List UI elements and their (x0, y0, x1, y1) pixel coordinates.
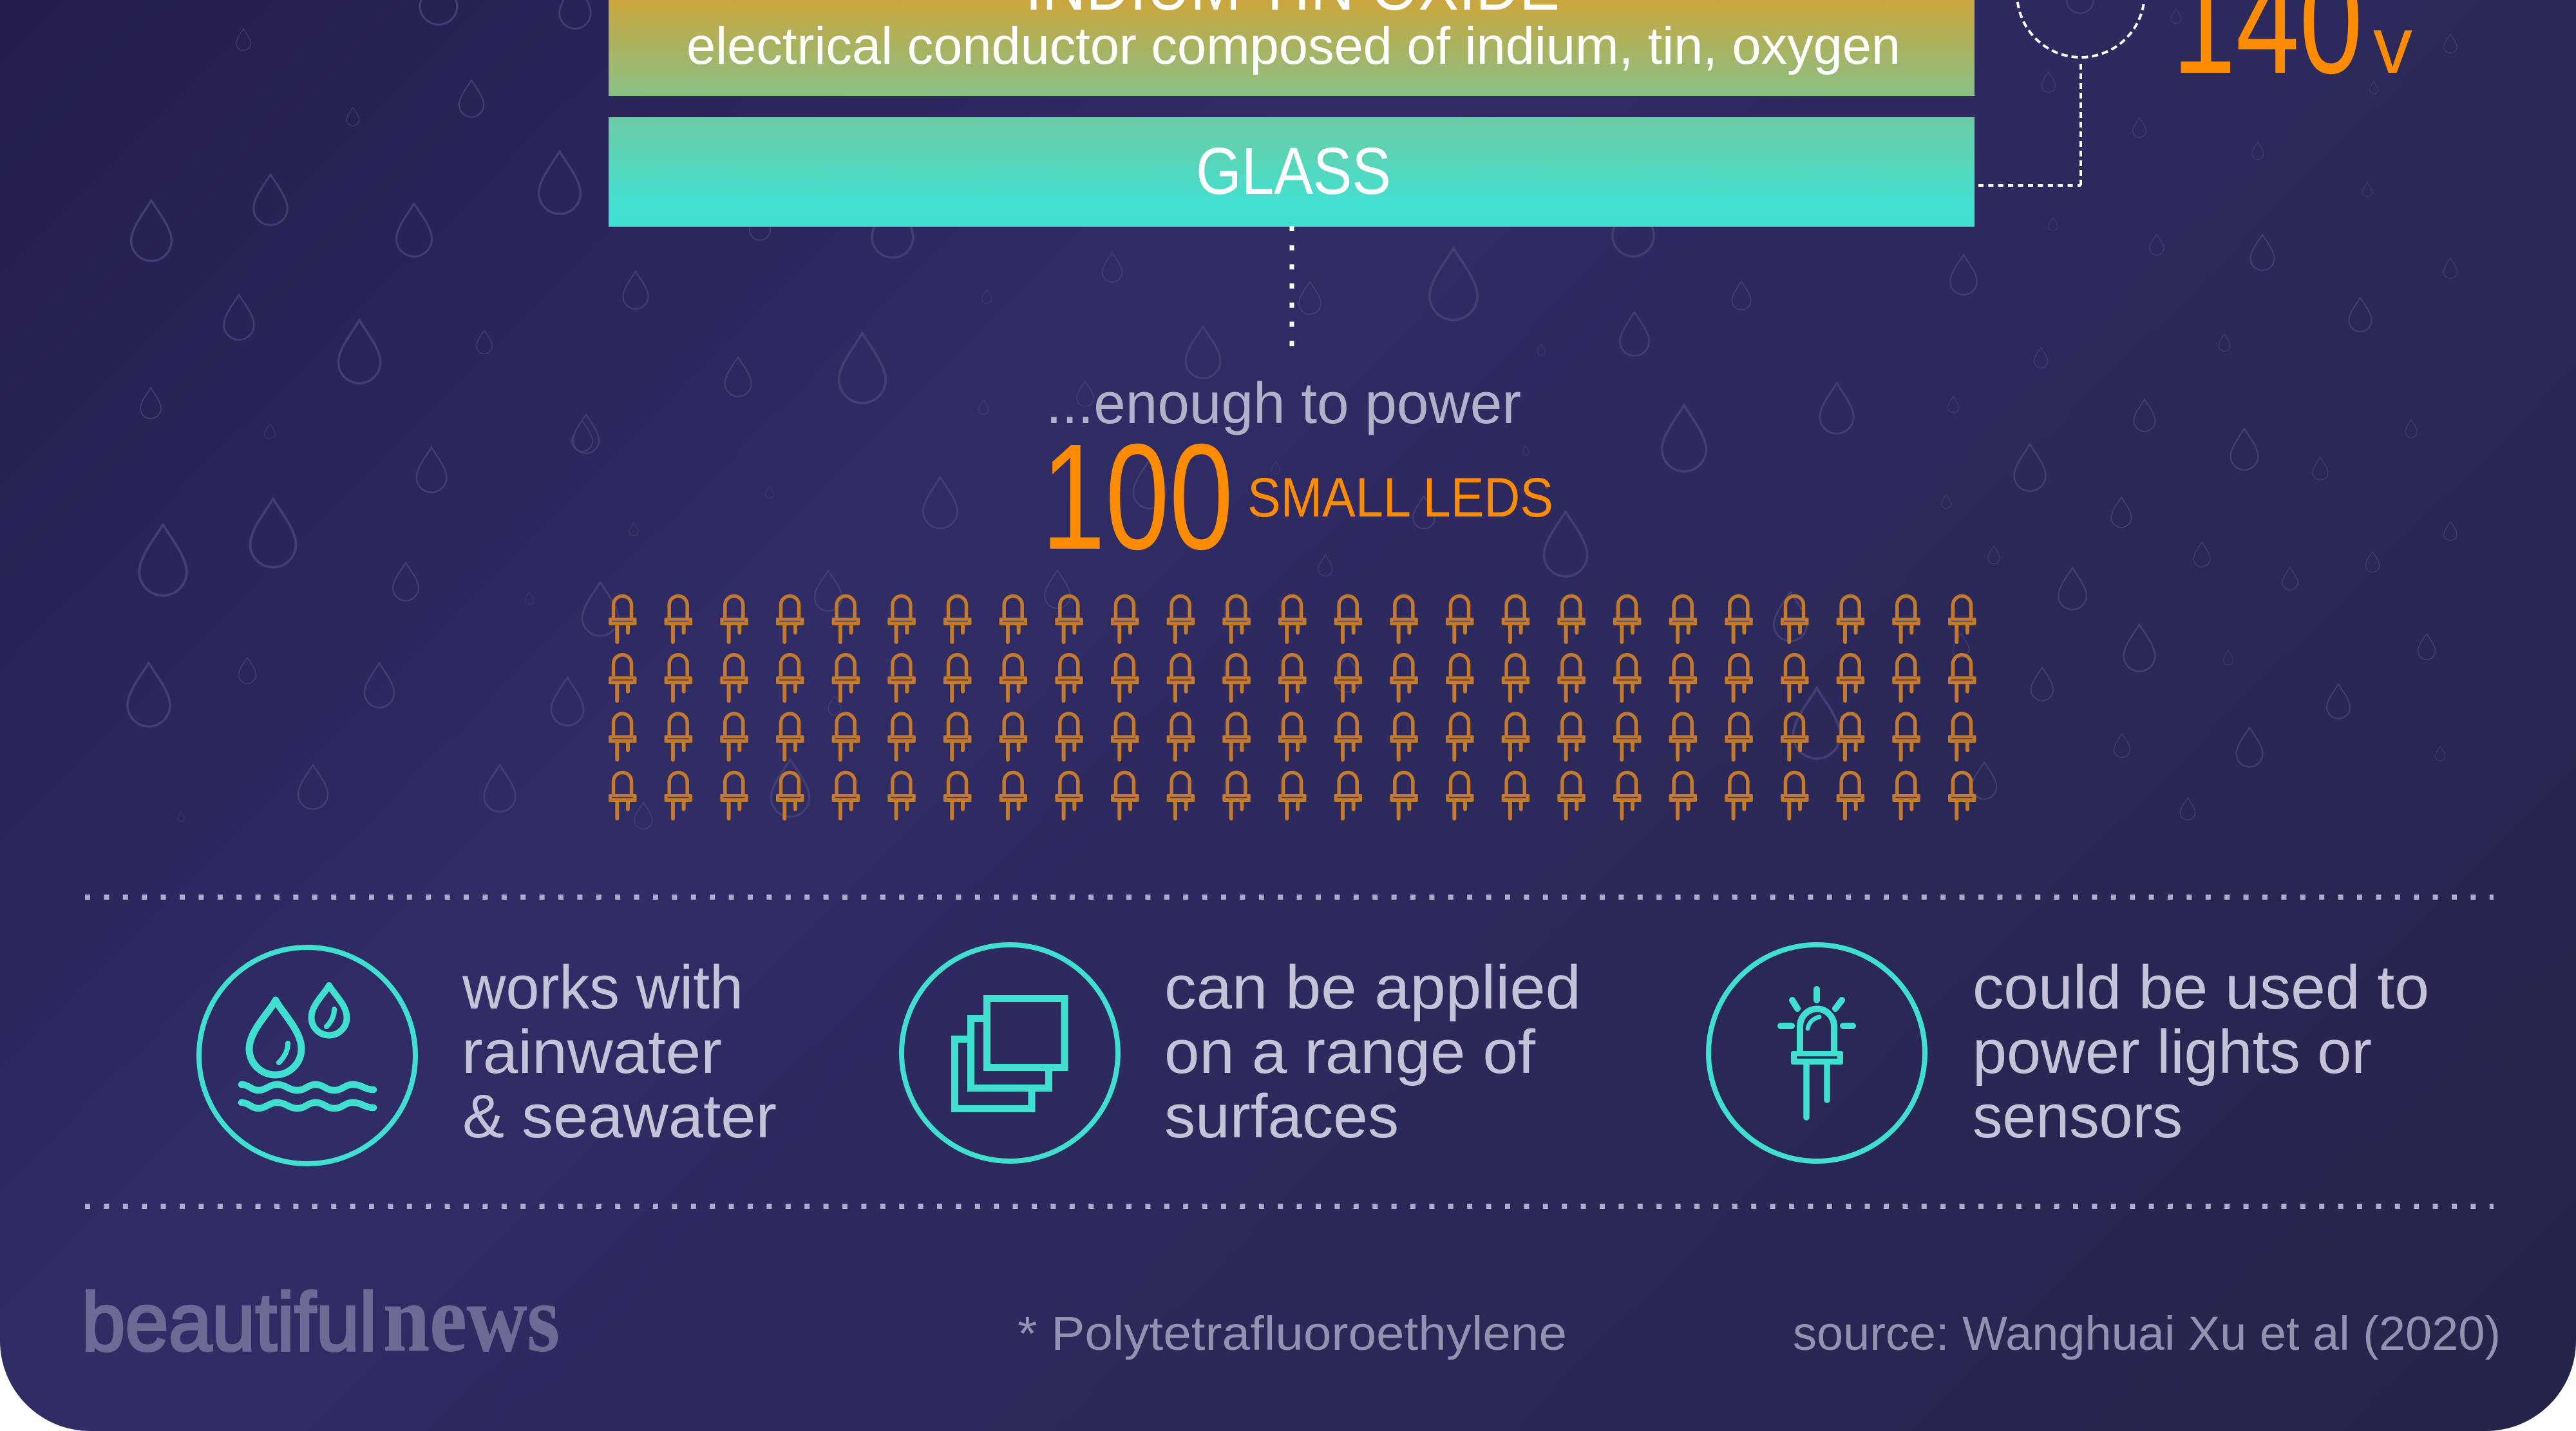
logo: beautifulnews: beautiful (82, 1276, 377, 1369)
glass layer (609, 117, 1975, 227)
LED caption (1041, 372, 1553, 581)
LED caption: SMALL LEDS (1247, 467, 1553, 529)
logo: beautifulnews (82, 1266, 560, 1372)
feature: rainwater and seawater (199, 947, 777, 1164)
text: works with rainwater and seawater: & seawater (462, 1082, 777, 1151)
text: could be used to power lights or sensors: power lights or (1973, 1018, 2372, 1086)
text: can be applied on a range of surfaces: can be applied (1164, 953, 1581, 1022)
text: works with rainwater and seawater: rainwater (462, 1018, 722, 1086)
dotted connector from glass to LED caption (1289, 226, 1294, 346)
feature: range of surfaces (902, 945, 1581, 1161)
text: can be applied on a range of surfaces (1164, 953, 1581, 1151)
text: works with rainwater and seawater (462, 953, 777, 1151)
text: could be used to power lights or sensors: could be used to (1973, 953, 2429, 1022)
source: source: Wanghuai Xu et al (2020) (1793, 1307, 2501, 1360)
LED caption: ...enough to power (1046, 372, 1521, 436)
text: could be used to power lights or sensors: sensors (1973, 1082, 2183, 1151)
icon: stacked layers (902, 945, 1118, 1161)
feature: power lights or sensors (1709, 945, 2429, 1161)
background rain drop pattern (128, 0, 2458, 829)
indium tin oxide layer (609, 0, 1975, 96)
icon: water drops and waves (199, 947, 415, 1164)
text: could be used to power lights or sensors (1973, 953, 2429, 1151)
glass layer: GLASS (1196, 134, 1391, 208)
icon: glowing LED (1709, 945, 1925, 1161)
grid of 100 LED icons (609, 596, 1976, 819)
text: can be applied on a range of surfaces: surfaces (1164, 1082, 1399, 1151)
indium tin oxide layer: electrical conductor composed of indium, tin, oxygen (687, 17, 1900, 75)
dashed circuit connector from glass to voltage meter (1978, 0, 2145, 185)
footnote: * Polytetrafluoroethylene (1018, 1307, 1567, 1360)
text: works with rainwater and seawater: works with (462, 953, 743, 1022)
logo: beautifulnews: news (383, 1266, 560, 1372)
LED caption: 100 (1041, 412, 1233, 581)
text: can be applied on a range of surfaces: on a range of (1164, 1018, 1535, 1086)
voltage value: v (2373, 1, 2412, 90)
